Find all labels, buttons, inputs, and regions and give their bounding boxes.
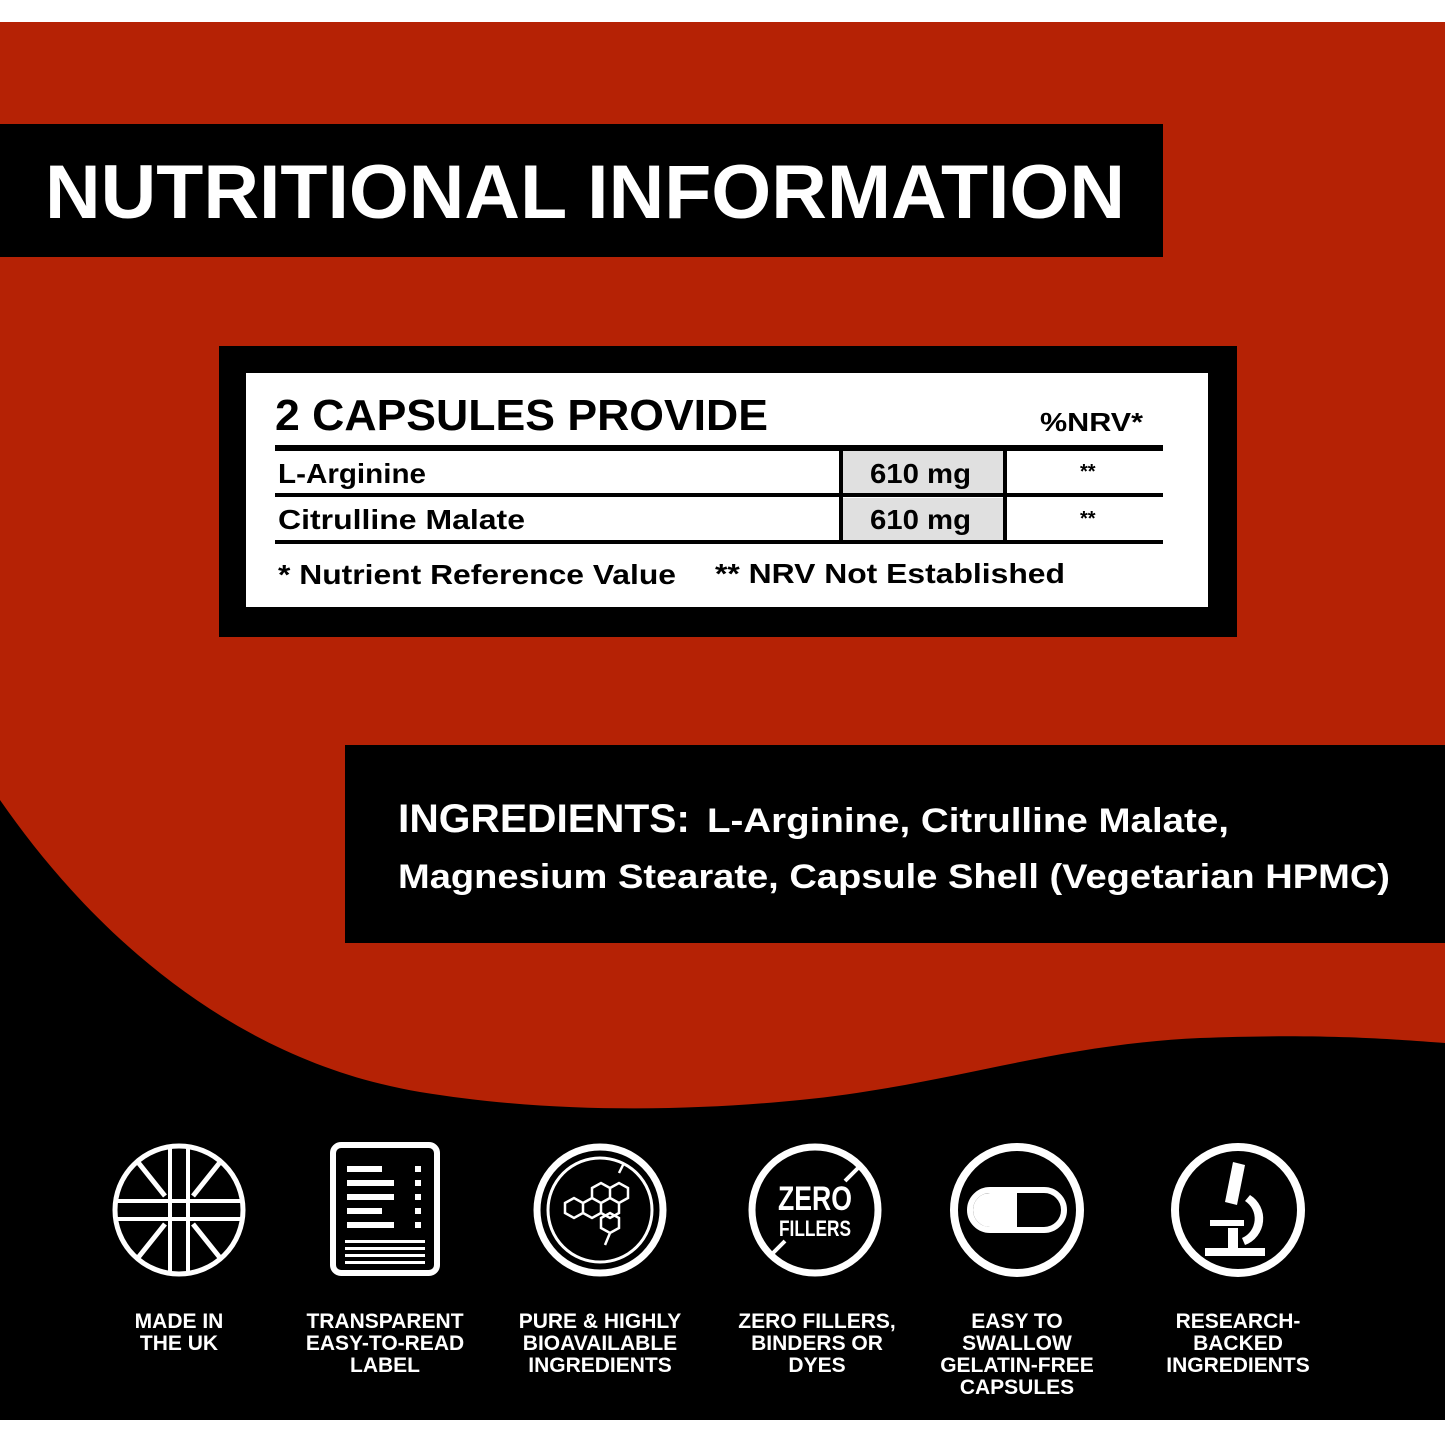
ingredients panel: L-Arginine, Citrulline Malate, [707,802,1229,840]
black wave bottom [0,800,1445,1420]
row: Citrulline Malate: Citrulline Malate [278,504,525,535]
icon: union flag [115,1146,243,1274]
row: Citrulline Malate: 610 mg [870,504,971,535]
row: L-Arginine [278,458,1096,489]
feature labels: EASY-TO-READ [306,1332,464,1355]
feature labels: DYES [788,1354,846,1377]
row: L-Arginine: ** [1080,461,1096,483]
feature labels: BIOAVAILABLE [523,1332,677,1355]
feature labels: RESEARCH- [1176,1310,1300,1333]
table heading: 2 CAPSULES PROVIDE [275,391,768,440]
icon: capsule [954,1147,1080,1273]
feature labels: INGREDIENTS [528,1354,672,1377]
icon: zero fillers: ZERO [778,1180,852,1218]
icon: molecule [537,1147,663,1273]
ingredients panel [345,745,1445,943]
title banner: NUTRITIONAL INFORMATION [45,150,1125,235]
feature labels: INGREDIENTS [1166,1354,1310,1377]
footnotes: ** NRV Not Established [715,558,1065,589]
row: L-Arginine: L-Arginine [278,458,426,489]
title banner [0,124,1163,257]
ingredients panel: Magnesium Stearate, Capsule Shell (Vegetarian HPMC) [398,858,1390,896]
feature labels: CAPSULES [960,1376,1074,1399]
icon: zero fillers: FILLERS [779,1216,851,1241]
footnotes: * Nutrient Reference Value [278,559,676,590]
icon: label [333,1145,437,1273]
feature labels: ZERO FILLERS, [738,1310,896,1333]
feature labels: GELATIN-FREE [940,1354,1094,1377]
row: Citrulline Malate: ** [1080,508,1096,530]
nutrition table panel: %NRV* [1040,407,1144,437]
feature labels: THE UK [140,1332,218,1355]
feature labels: BACKED [1193,1332,1283,1355]
feature labels: TRANSPARENT [306,1310,464,1333]
feature labels: PURE & HIGHLY [519,1310,681,1333]
feature labels [135,1310,1310,1399]
feature labels: SWALLOW [962,1332,1072,1355]
feature labels: LABEL [350,1354,420,1377]
nutrition table panel [219,346,1237,637]
icon: microscope [1175,1147,1301,1273]
row: L-Arginine: 610 mg [870,458,971,489]
icon: zero fillers [752,1147,878,1273]
ingredients panel: INGREDIENTS: [398,797,690,841]
feature labels: MADE IN [135,1310,223,1333]
feature labels: BINDERS OR [751,1332,883,1355]
footnotes [278,558,1065,590]
row: Citrulline Malate [278,504,1096,535]
feature labels: EASY TO [971,1310,1063,1333]
